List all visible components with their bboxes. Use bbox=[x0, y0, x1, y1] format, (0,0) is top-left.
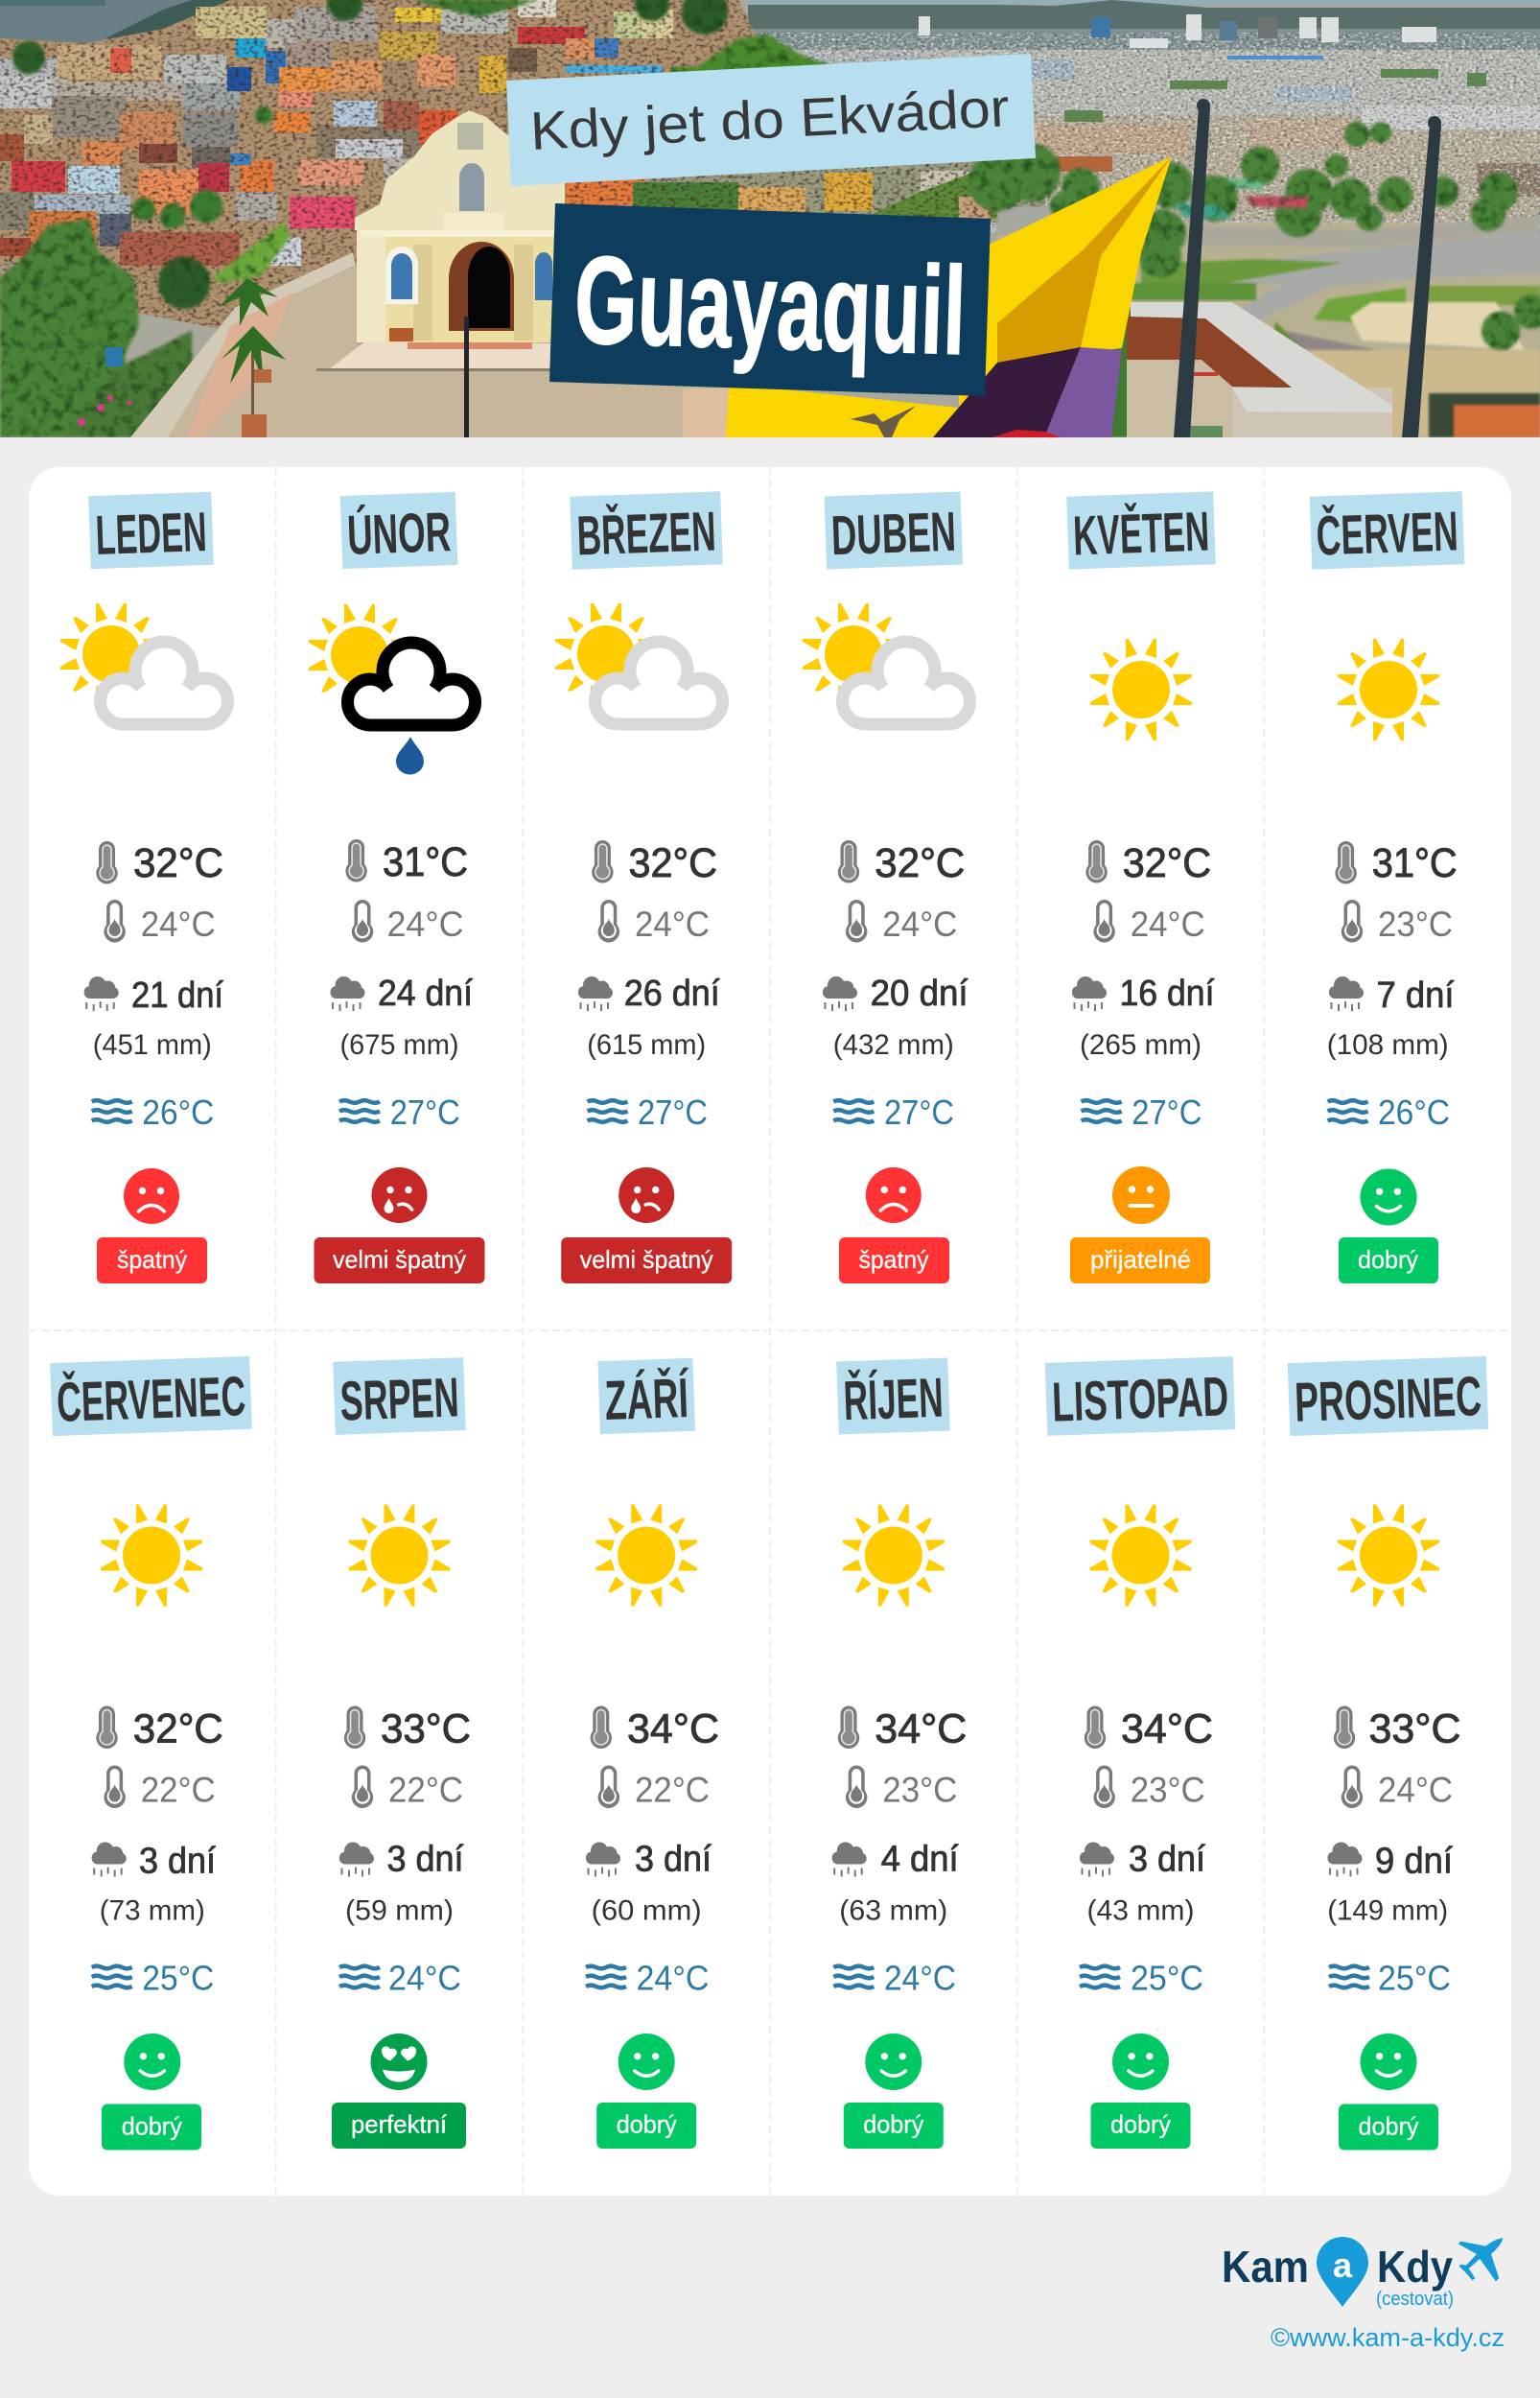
month heading bbox=[333, 1357, 466, 1435]
max temperature bbox=[592, 840, 717, 886]
month card: duben bbox=[803, 492, 970, 1283]
rainy days bbox=[832, 1840, 959, 1880]
rating badge bbox=[839, 1237, 949, 1283]
min temperature bbox=[1093, 900, 1205, 944]
sea temperature bbox=[339, 1093, 460, 1132]
rating face bbox=[1360, 2034, 1417, 2090]
sea temperature: 27°C bbox=[638, 1093, 708, 1132]
rating face bbox=[865, 2034, 922, 2090]
max temperature: 34°C bbox=[1121, 1705, 1213, 1751]
max temperature bbox=[96, 1705, 223, 1751]
rating badge: dobrý bbox=[1110, 2110, 1171, 2139]
rating badge bbox=[97, 1237, 207, 1283]
rating badge bbox=[596, 2103, 696, 2149]
logo: Kam a Kdy: (cestovat) bbox=[1376, 2289, 1454, 2310]
max temperature: 31°C bbox=[1372, 840, 1458, 886]
max temperature: 33°C bbox=[1369, 1705, 1461, 1751]
rainy days: 3 dní bbox=[1129, 1840, 1205, 1880]
month heading bbox=[597, 1358, 695, 1434]
min temperature: 22°C bbox=[388, 1771, 463, 1809]
icon: sun bbox=[349, 1504, 451, 1606]
rating face bbox=[1360, 1168, 1417, 1226]
rainy days bbox=[1327, 1842, 1453, 1882]
rating badge bbox=[561, 1237, 732, 1283]
month card: květen bbox=[1066, 491, 1216, 1283]
rainfall: (451 mm) bbox=[93, 1029, 212, 1061]
icon: sun bbox=[1090, 639, 1192, 741]
logo: Kam a Kdy bbox=[1222, 2237, 1504, 2310]
sea temperature: 24°C bbox=[388, 1959, 461, 1997]
icon: sun bbox=[1089, 1504, 1191, 1606]
month heading bbox=[340, 492, 457, 569]
sea temperature bbox=[92, 1959, 214, 1997]
min temperature: 24°C bbox=[387, 905, 464, 944]
rating badge: dobrý bbox=[1358, 2112, 1419, 2141]
sea temperature: 25°C bbox=[1378, 1959, 1451, 1997]
rainy days bbox=[339, 1840, 464, 1880]
icon: sun bbox=[1338, 1504, 1439, 1606]
max temperature bbox=[1085, 840, 1211, 886]
rating badge: dobrý bbox=[122, 2112, 182, 2141]
min temperature: 24°C bbox=[1378, 1771, 1453, 1809]
sea temperature bbox=[833, 1093, 954, 1132]
month heading bbox=[50, 1356, 252, 1436]
rainy days bbox=[1080, 1840, 1205, 1880]
flag poles bbox=[1174, 99, 1441, 437]
rainy days bbox=[92, 1842, 216, 1882]
min temperature: 23°C bbox=[882, 1771, 957, 1809]
month heading bbox=[1045, 1356, 1235, 1436]
icon: sun and cloud bbox=[60, 603, 228, 724]
rainfall: (59 mm) bbox=[345, 1895, 454, 1926]
min temperature: 24°C bbox=[141, 905, 216, 944]
subtitle: Kdy jet do Ekvádor: Kdy jet do Ekvádor bbox=[528, 77, 1011, 161]
rainy days bbox=[1329, 976, 1455, 1016]
rainfall: (432 mm) bbox=[833, 1029, 954, 1061]
rainy days: 4 dní bbox=[881, 1840, 959, 1880]
month card: říjen bbox=[832, 1357, 967, 2149]
max temperature bbox=[838, 840, 965, 886]
min temperature bbox=[846, 1765, 957, 1809]
sea temperature: 27°C bbox=[1132, 1093, 1202, 1132]
rainfall: (265 mm) bbox=[1080, 1029, 1202, 1061]
min temperature: 22°C bbox=[635, 1771, 710, 1809]
sea temperature: 26°C bbox=[1378, 1093, 1450, 1132]
month card: září bbox=[586, 1358, 719, 2149]
mid slope behind title bbox=[566, 161, 1045, 223]
min temperature: 22°C bbox=[141, 1771, 216, 1809]
rainy days: 21 dní bbox=[131, 976, 223, 1016]
month heading bbox=[88, 492, 214, 569]
rainy days bbox=[1072, 974, 1215, 1014]
rating badge: přijatelné bbox=[1090, 1245, 1191, 1274]
month card: listopad bbox=[1045, 1356, 1235, 2149]
sea temperature: 24°C bbox=[884, 1959, 956, 1997]
rainy days: 16 dní bbox=[1120, 974, 1215, 1014]
title: Guayaquil: Guayaquil bbox=[572, 229, 968, 381]
sea temperature: 26°C bbox=[142, 1093, 214, 1132]
max temperature: 32°C bbox=[133, 1705, 223, 1751]
rating face bbox=[124, 1168, 179, 1224]
month heading: ČERVENEC bbox=[56, 1365, 246, 1434]
min temperature bbox=[352, 900, 464, 944]
month heading: ŘÍJEN bbox=[843, 1367, 945, 1432]
icon: sun bbox=[843, 1504, 945, 1606]
rainfall: (615 mm) bbox=[587, 1029, 706, 1061]
max temperature: 34°C bbox=[627, 1705, 719, 1751]
sea temperature bbox=[1329, 1959, 1451, 1997]
sea temperature bbox=[1080, 1959, 1203, 1997]
min temperature bbox=[104, 1765, 216, 1809]
hill with colourful houses bbox=[0, 0, 767, 331]
stone wall and plaza bbox=[130, 252, 734, 437]
right side: tree clusters bbox=[968, 122, 1540, 350]
sea temperature bbox=[1327, 1093, 1450, 1132]
max temperature: 34°C bbox=[875, 1705, 967, 1751]
min temperature bbox=[1093, 1765, 1205, 1809]
month heading bbox=[825, 492, 963, 569]
white-roofed building bbox=[1127, 302, 1392, 437]
icon: sun bbox=[1338, 639, 1439, 741]
min temperature bbox=[352, 1765, 463, 1809]
min temperature bbox=[846, 900, 957, 944]
month heading bbox=[570, 491, 723, 570]
month heading: KVĚTEN bbox=[1072, 501, 1210, 567]
logo: Kam a Kdy: Kdy bbox=[1377, 2242, 1453, 2292]
month heading bbox=[836, 1357, 950, 1435]
icon: sun, dark cloud and rain drop bbox=[309, 604, 476, 775]
rainy days bbox=[823, 974, 968, 1014]
sea temperature: 25°C bbox=[142, 1959, 214, 1997]
palm trees bbox=[219, 278, 286, 437]
rainy days: 3 dní bbox=[387, 1840, 464, 1880]
subtitle: Kdy jet do Ekvádor bbox=[506, 54, 1036, 186]
panel: months table bbox=[29, 467, 1511, 2196]
website credit: ©www.kam-a-kdy.cz bbox=[1271, 2323, 1505, 2352]
sea temperature: 27°C bbox=[884, 1093, 954, 1132]
rainfall: (43 mm) bbox=[1087, 1895, 1195, 1926]
rainy days: 24 dní bbox=[378, 974, 473, 1014]
rating face bbox=[866, 1167, 922, 1223]
rainy days: 20 dní bbox=[871, 974, 968, 1014]
max temperature: 32°C bbox=[133, 840, 223, 886]
month heading: LEDEN bbox=[95, 501, 208, 567]
hero photo: Guayaquil panorama bbox=[0, 0, 1540, 437]
icon: sun bbox=[101, 1504, 202, 1606]
sea temperature bbox=[833, 1959, 956, 1997]
rating face bbox=[1112, 1166, 1170, 1224]
rainfall: (60 mm) bbox=[592, 1895, 702, 1926]
min temperature bbox=[104, 900, 216, 944]
rating badge bbox=[844, 2103, 944, 2149]
rainfall: (149 mm) bbox=[1327, 1895, 1448, 1926]
min temperature: 23°C bbox=[1378, 905, 1453, 944]
month card: prosinec bbox=[1288, 1356, 1488, 2151]
church bbox=[355, 110, 569, 437]
rainfall: (63 mm) bbox=[839, 1895, 947, 1926]
city texture bbox=[748, 33, 1540, 232]
month heading bbox=[1066, 491, 1216, 570]
Ecuador flag bbox=[726, 156, 1172, 437]
sea temperature: 25°C bbox=[1131, 1959, 1203, 1997]
rating badge bbox=[332, 2103, 466, 2149]
sea temperature bbox=[587, 1093, 708, 1132]
max temperature: 33°C bbox=[381, 1705, 471, 1751]
rainy days bbox=[84, 976, 223, 1016]
icon: airplane bbox=[1458, 2238, 1504, 2281]
month heading: ÚNOR bbox=[346, 501, 452, 567]
min temperature bbox=[1342, 1765, 1453, 1809]
icon: sun bbox=[595, 1504, 697, 1606]
icon: map pin: a bbox=[1333, 2245, 1353, 2285]
rating badge bbox=[315, 1237, 485, 1283]
rating badge bbox=[1070, 1237, 1210, 1283]
min temperature: 24°C bbox=[635, 905, 710, 944]
rating badge bbox=[1091, 2103, 1191, 2149]
min temperature bbox=[598, 900, 710, 944]
rating badge: dobrý bbox=[617, 2110, 677, 2139]
max temperature: 32°C bbox=[875, 840, 965, 886]
sea temperature bbox=[1082, 1093, 1202, 1132]
icon: sun and cloud bbox=[555, 603, 723, 724]
min temperature: 24°C bbox=[1131, 905, 1205, 944]
rating face bbox=[370, 2034, 428, 2090]
month heading bbox=[1310, 491, 1464, 570]
max temperature: 32°C bbox=[1123, 840, 1211, 886]
month heading: ZÁŘÍ bbox=[604, 1367, 690, 1432]
sea temperature: 24°C bbox=[637, 1959, 710, 1997]
green trees on hills, lower left and slope bbox=[0, 0, 834, 437]
rating badge: dobrý bbox=[1358, 1245, 1418, 1274]
month heading: SRPEN bbox=[339, 1366, 460, 1433]
min temperature: 23°C bbox=[1131, 1771, 1205, 1809]
month card: leden bbox=[60, 492, 228, 1283]
sea temperature bbox=[339, 1959, 461, 1997]
title: Guayaquil bbox=[549, 203, 991, 396]
min temperature: 24°C bbox=[882, 905, 957, 944]
logo: Kam a Kdy: Kam bbox=[1222, 2242, 1309, 2292]
rainy days: 3 dní bbox=[139, 1842, 216, 1882]
month card: červenec bbox=[50, 1356, 252, 2151]
rating badge: velmi špatný bbox=[333, 1245, 466, 1274]
rating badge: špatný bbox=[859, 1245, 928, 1274]
month card: únor bbox=[309, 492, 485, 1283]
sea temperature bbox=[586, 1959, 710, 1997]
rainy days bbox=[578, 974, 720, 1014]
rainy days: 26 dní bbox=[624, 974, 720, 1014]
rainfall: (675 mm) bbox=[339, 1029, 458, 1061]
rating face bbox=[618, 1167, 674, 1223]
max temperature: 32°C bbox=[629, 840, 717, 886]
max temperature bbox=[345, 839, 468, 885]
rating badge: velmi špatný bbox=[580, 1245, 713, 1274]
rating face bbox=[124, 2034, 180, 2090]
rating face bbox=[372, 1167, 428, 1223]
rainy days bbox=[586, 1840, 712, 1880]
month card: červen bbox=[1310, 491, 1464, 1283]
rating badge bbox=[102, 2104, 201, 2151]
rainfall: (108 mm) bbox=[1327, 1029, 1449, 1061]
rating badge bbox=[1339, 2104, 1438, 2151]
sea temperature: 27°C bbox=[390, 1093, 460, 1132]
min temperature bbox=[1342, 900, 1453, 944]
month heading: BŘEZEN bbox=[576, 500, 717, 568]
rating badge: perfektní bbox=[351, 2110, 448, 2139]
month heading: DUBEN bbox=[830, 501, 957, 567]
rainfall: (73 mm) bbox=[100, 1895, 205, 1926]
rainy days bbox=[330, 974, 473, 1014]
rating badge bbox=[1339, 1237, 1438, 1283]
rating face bbox=[1112, 2034, 1169, 2090]
max temperature bbox=[96, 840, 223, 886]
rating badge: dobrý bbox=[863, 2110, 923, 2139]
max temperature: 31°C bbox=[383, 839, 468, 885]
icon: sun and cloud bbox=[803, 603, 970, 724]
month card: srpen bbox=[332, 1357, 471, 2149]
rating face bbox=[618, 2034, 675, 2090]
rating badge: špatný bbox=[117, 1245, 187, 1274]
min temperature bbox=[598, 1765, 710, 1809]
sea temperature bbox=[92, 1093, 214, 1132]
rainy days: 3 dní bbox=[635, 1840, 712, 1880]
icon: map pin bbox=[1317, 2237, 1368, 2307]
max temperature bbox=[1335, 840, 1458, 886]
rainy days: 7 dní bbox=[1377, 976, 1455, 1016]
rainy days: 9 dní bbox=[1375, 1842, 1453, 1882]
right side: road and open ground bbox=[997, 206, 1540, 437]
month card: březen bbox=[555, 491, 732, 1283]
month heading: LISTOPAD bbox=[1051, 1365, 1229, 1434]
